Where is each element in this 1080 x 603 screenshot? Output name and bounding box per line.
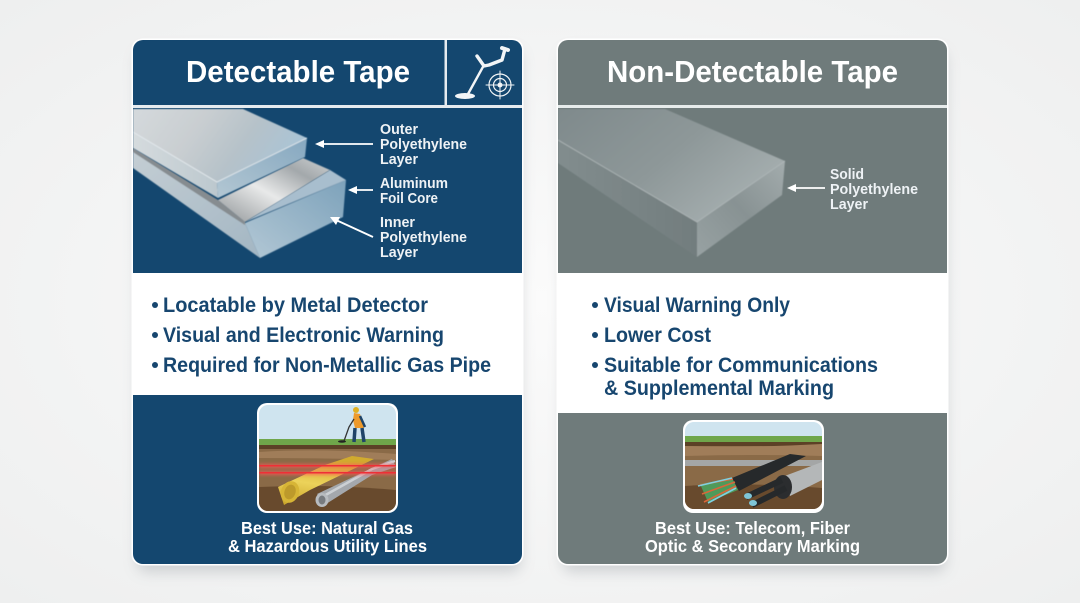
callout: outer polyethylene layer: Polyethylene — [380, 137, 467, 153]
yellow gas pipe — [278, 456, 374, 505]
multi-conductor cable — [744, 462, 822, 506]
text block: detectable benefits: Visual and Electronic Warning — [163, 324, 444, 347]
callout: solid polyethylene layer: Solid — [830, 167, 864, 183]
illustration: buried telecom and fiber cables — [683, 420, 824, 513]
outer polyethylene layer — [133, 109, 307, 198]
caption: non-detectable best use: Optic & Secondary Marking — [645, 536, 860, 556]
callout: solid polyethylene layer — [787, 167, 918, 213]
illustration: detector over buried gas pipes — [257, 403, 398, 513]
callout: inner polyethylene layer: Inner — [380, 215, 415, 231]
text block: detectable benefits: Required for Non-Metallic Gas Pipe — [163, 354, 491, 377]
callout: aluminum foil core: Foil Core — [380, 191, 438, 207]
heading: detectable tape: Detectable Tape — [186, 54, 410, 89]
text block: detectable benefits: Locatable by Metal Detector — [163, 294, 428, 317]
illustration: solid polyethylene tape — [558, 109, 785, 257]
illustration: layered tape cross-section — [133, 109, 346, 258]
panel: non-detectable tape — [556, 38, 948, 566]
inner polyethylene layer — [133, 150, 346, 258]
callout: outer polyethylene layer — [315, 122, 467, 168]
callout: outer polyethylene layer: Outer — [380, 122, 418, 138]
caption: detectable best use — [228, 518, 427, 556]
callout: inner polyethylene layer — [330, 215, 467, 261]
fiber optic cable — [698, 454, 806, 503]
caption: detectable best use: & Hazardous Utility Lines — [228, 536, 427, 556]
grey pipe — [316, 459, 396, 507]
callout: inner polyethylene layer: Layer — [380, 245, 418, 261]
text block: detectable benefits — [133, 273, 522, 395]
red signal lines — [259, 464, 396, 475]
callout: aluminum foil core — [348, 176, 448, 207]
caption: non-detectable best use — [645, 518, 860, 556]
text block: non-detectable benefits — [558, 273, 947, 413]
caption: detectable best use: Best Use: Natural Gas — [241, 518, 413, 538]
text block: non-detectable benefits: Lower Cost — [604, 324, 711, 347]
callout: inner polyethylene layer: Polyethylene — [380, 230, 467, 246]
callout: aluminum foil core: Aluminum — [380, 176, 448, 192]
callout: solid polyethylene layer: Polyethylene — [830, 182, 918, 198]
icon: metal detector and target — [455, 48, 514, 99]
worker with detector — [338, 407, 365, 443]
heading: non-detectable tape: Non-Detectable Tape — [607, 54, 898, 89]
aluminum foil core — [133, 148, 330, 225]
text block: non-detectable benefits: Suitable for Communications — [604, 354, 878, 377]
callout: solid polyethylene layer: Layer — [830, 197, 868, 213]
callout: outer polyethylene layer: Layer — [380, 152, 418, 168]
panel: detectable tape — [132, 38, 524, 566]
caption: non-detectable best use: Best Use: Telecom, Fiber — [655, 518, 850, 538]
text block: non-detectable benefits: Visual Warning Only — [604, 294, 790, 317]
text block: non-detectable benefits: & Supplemental Marking — [604, 377, 834, 400]
